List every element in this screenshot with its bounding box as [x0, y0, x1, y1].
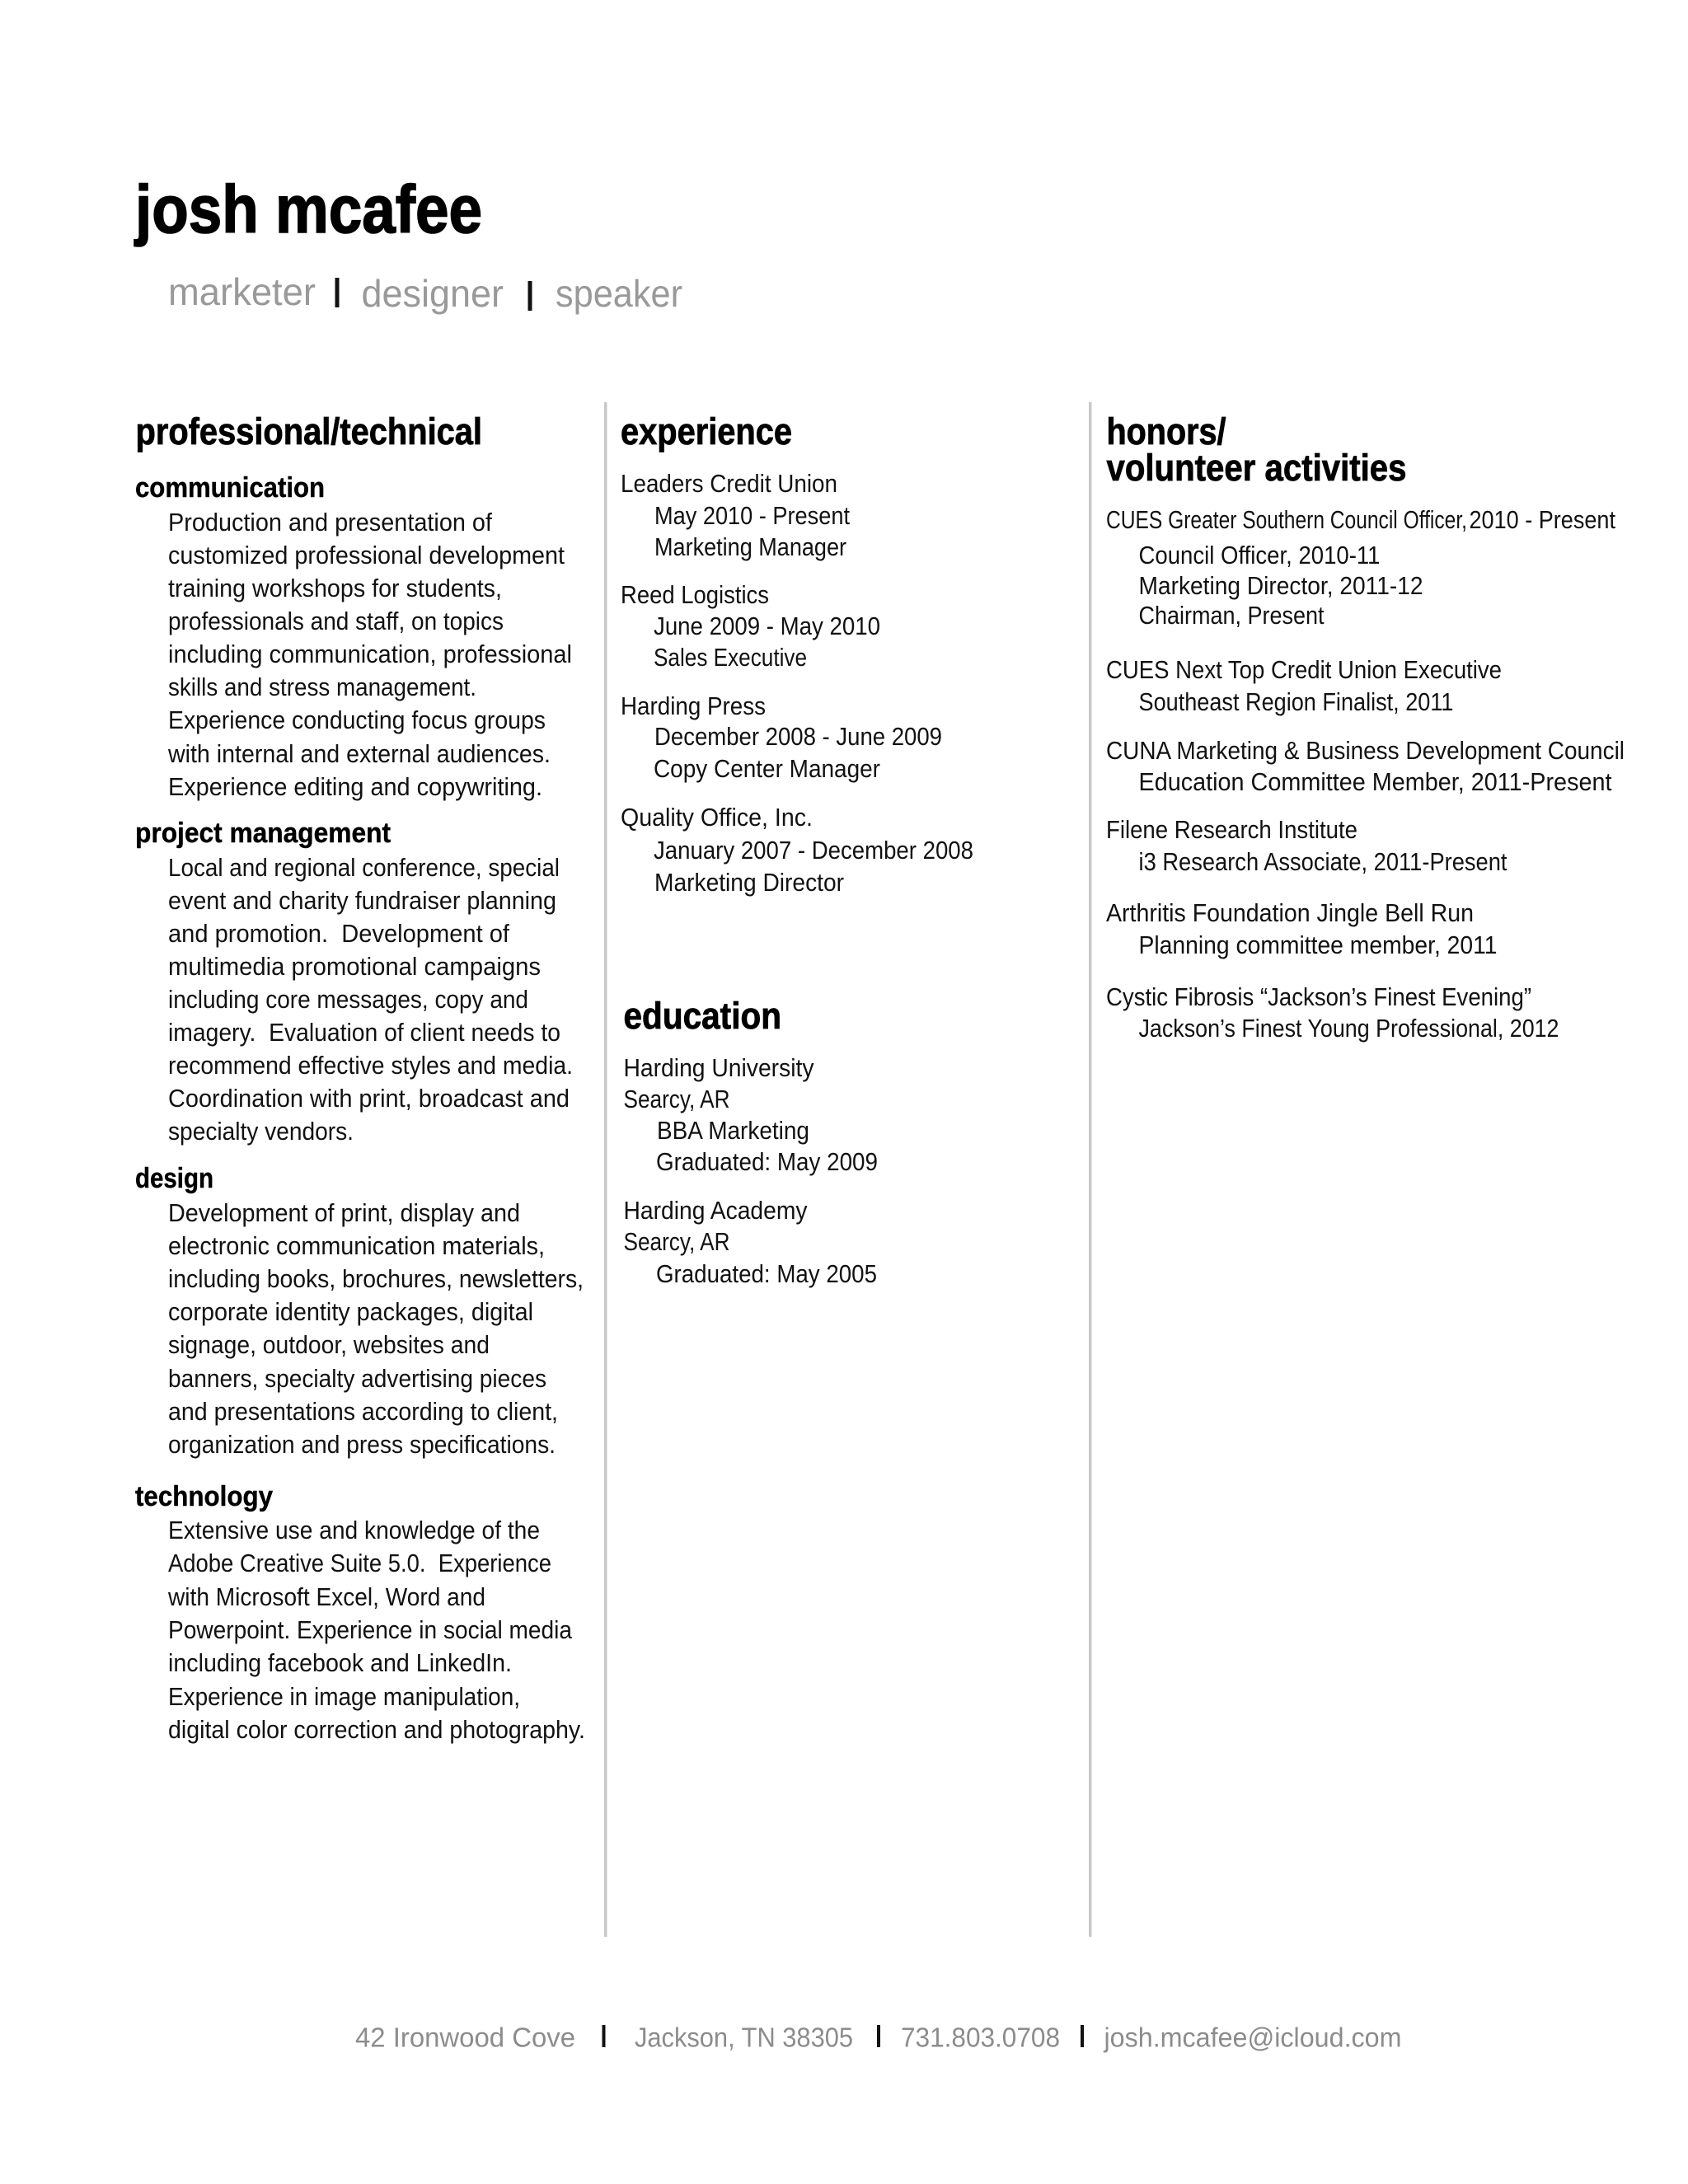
- job: Harding Press: Copy Center Manager: [654, 755, 880, 783]
- title: name: josh mcafee: [134, 172, 482, 247]
- text block: project management: event and charity fundraiser planning: [168, 887, 556, 915]
- text block: communication: skills and stress management.: [168, 673, 476, 701]
- text block: technology: Adobe Creative Suite 5.0. Experience: [168, 1549, 551, 1577]
- subheading: communication: communication: [135, 472, 325, 504]
- entry: CUES Next Top Credit Union Executive: CUES Next Top Credit Union Executive: [1106, 656, 1502, 684]
- heading: education: education: [623, 995, 781, 1037]
- section: communication: [135, 472, 572, 801]
- school: Harding University: Harding University: [623, 1054, 814, 1082]
- footer: contact details: 42 Ironwood Cove: [355, 2022, 575, 2052]
- school: Harding University: Searcy, AR: [623, 1085, 730, 1113]
- text block: project management: Local and regional conference, special: [168, 854, 560, 882]
- text block: project management: imagery. Evaluation of client needs to: [168, 1019, 560, 1047]
- job: Leaders Credit Union: Leaders Credit Union: [621, 470, 837, 498]
- text block: design: corporate identity packages, digital: [168, 1298, 533, 1326]
- text block: design: signage, outdoor, websites and: [168, 1331, 490, 1359]
- entry: Cystic Fibrosis Jackson's Finest Evening: Cystic Fibrosis “Jackson’s Finest Evening”: [1106, 983, 1531, 1011]
- job: Harding Press: December 2008 - June 2009: [654, 723, 942, 751]
- job: Harding Press: [621, 692, 942, 783]
- entry: CUES Next Top Credit Union Executive: Southeast Region Finalist, 2011: [1139, 688, 1454, 716]
- job: Quality Office, Inc.: January 2007 - December 2008: [654, 837, 973, 865]
- entry: Filene Research Institute: [1106, 816, 1507, 876]
- job: Quality Office, Inc.: Marketing Director: [654, 869, 844, 897]
- text block: communication: with internal and external audiences.: [167, 740, 551, 768]
- school: Harding Academy: Searcy, AR: [623, 1228, 730, 1256]
- job: Reed Logistics: [621, 581, 880, 672]
- entry: CUES Greater Southern Council Officer: 2010 - Present: [1469, 506, 1615, 534]
- heading: experience: experience: [621, 410, 792, 452]
- heading: honors/volunteer activities: volunteer activities: [1106, 447, 1406, 489]
- text block: project management: [168, 854, 573, 1146]
- text block: technology: [167, 1516, 585, 1744]
- entry: Arthritis Foundation Jingle Bell Run: Planning committee member, 2011: [1139, 931, 1497, 959]
- text block: technology: Experience in image manipulation,: [168, 1683, 520, 1711]
- school: Harding University: [623, 1054, 878, 1176]
- section: design: [135, 1163, 584, 1459]
- heading: honors/volunteer activities: honors/: [1106, 410, 1226, 452]
- school: Harding University: Graduated: May 2009: [656, 1148, 878, 1176]
- entry: Arthritis Foundation Jingle Bell Run: [1106, 899, 1497, 959]
- text block: communication: customized professional development: [168, 541, 565, 569]
- text block: project management: and promotion. Development of: [168, 920, 509, 948]
- entry: CUES Greater Southern Council Officer: [1106, 506, 1615, 630]
- text block: project management: Coordination with print, broadcast and: [168, 1085, 570, 1113]
- subheading: technology: technology: [135, 1481, 273, 1512]
- section: technology: [135, 1481, 585, 1744]
- text block: project management: including core messages, copy and: [168, 986, 528, 1014]
- job: Quality Office, Inc.: [621, 804, 973, 897]
- text block: communication: Production and presentation of: [168, 509, 492, 537]
- text block: design: Development of print, display and: [168, 1199, 520, 1227]
- entry: CUNA Marketing & Business Development Council: [1106, 737, 1625, 796]
- text block: communication: Experience conducting focus groups: [168, 706, 546, 734]
- text block: design: [168, 1199, 584, 1459]
- text block: technology: including facebook and LinkedIn.: [168, 1649, 512, 1677]
- entry: CUES Next Top Credit Union Executive: [1106, 656, 1502, 716]
- panel: education: [623, 995, 878, 1288]
- heading: professional/technical: professional/technical: [135, 410, 482, 452]
- panel: honors/volunteer activities: [1106, 410, 1625, 1043]
- subheading: design: design: [135, 1163, 213, 1194]
- panel: experience: [621, 410, 973, 897]
- entry: Filene Research Institute: i3 Research Associate, 2011-Present: [1139, 848, 1507, 876]
- school: Harding University: BBA Marketing: [657, 1117, 809, 1145]
- text block: communication: professionals and staff, on topics: [168, 607, 504, 635]
- entry: CUNA Marketing & Business Development Council: CUNA Marketing & Business Development Council: [1106, 737, 1625, 765]
- text block: communication: Experience editing and copywriting.: [168, 773, 542, 801]
- tagline: designer: [361, 272, 504, 315]
- footer: contact details: josh.mcafee@icloud.com: [1104, 2022, 1401, 2052]
- panel: professional/technical: [135, 410, 585, 1744]
- job: Harding Press: Harding Press: [621, 692, 766, 720]
- text block: design: and presentations according to client,: [168, 1398, 558, 1426]
- tagline: marketer: [168, 270, 316, 313]
- tagline: speaker: [556, 272, 682, 315]
- entry: Arthritis Foundation Jingle Bell Run: Arthritis Foundation Jingle Bell Run: [1106, 899, 1474, 927]
- school: Harding Academy: [623, 1197, 877, 1288]
- footer: contact details: Jackson, TN 38305: [635, 2022, 853, 2052]
- heading: honors/volunteer activities: [1106, 410, 1406, 489]
- text block: project management: multimedia promotional campaigns: [168, 953, 541, 981]
- text block: technology: digital color correction and photography.: [168, 1716, 585, 1744]
- text block: design: electronic communication materials,: [168, 1232, 545, 1260]
- entry: Filene Research Institute: Filene Research Institute: [1106, 816, 1357, 844]
- entry: CUES Greater Southern Council Officer: Marketing Director, 2011-12: [1139, 572, 1423, 600]
- job: Reed Logistics: Sales Executive: [654, 644, 807, 672]
- text block: project management: specialty vendors.: [168, 1118, 354, 1146]
- text block: design: including books, brochures, newsletters,: [168, 1265, 584, 1293]
- job: Reed Logistics: June 2009 - May 2010: [654, 612, 880, 640]
- text block: technology: with Microsoft Excel, Word and: [167, 1583, 485, 1611]
- text block: project management: recommend effective styles and media.: [168, 1052, 573, 1080]
- entry: CUES Greater Southern Council Officer: Council Officer, 2010-11: [1139, 541, 1380, 569]
- text block: communication: including communication, professional: [168, 640, 572, 668]
- text block: communication: [167, 509, 572, 801]
- text block: technology: Extensive use and knowledge of the: [168, 1516, 540, 1544]
- footer: contact details: 731.803.0708: [901, 2022, 1060, 2052]
- text block: design: organization and press specifications.: [168, 1431, 556, 1459]
- entry: CUNA Marketing & Business Development Council: Education Committee Member, 2011-Present: [1139, 768, 1612, 796]
- entry: Cystic Fibrosis Jackson's Finest Evening: Jackson’s Finest Young Professional, 2012: [1139, 1015, 1559, 1043]
- subheading: project management: project management: [135, 818, 391, 849]
- entry: CUES Greater Southern Council Officer: Chairman, Present: [1139, 602, 1325, 630]
- job: Reed Logistics: Reed Logistics: [621, 581, 769, 609]
- footer: contact details: [355, 2022, 1401, 2052]
- text block: design: banners, specialty advertising pieces: [168, 1365, 546, 1393]
- job: Leaders Credit Union: May 2010 - Present: [654, 502, 850, 530]
- school: Harding Academy: Graduated: May 2005: [656, 1260, 877, 1288]
- entry: Cystic Fibrosis Jackson's Finest Evening: [1106, 983, 1559, 1043]
- text block: technology: Powerpoint. Experience in social media: [168, 1616, 572, 1644]
- entry: CUES Greater Southern Council Officer: CUES Greater Southern Council Officer,: [1106, 506, 1467, 534]
- tagline: [168, 270, 682, 315]
- job: Quality Office, Inc.: Quality Office, Inc.: [621, 804, 813, 832]
- section: project management: [135, 818, 573, 1146]
- job: Leaders Credit Union: Marketing Manager: [654, 533, 846, 561]
- job: Leaders Credit Union: [621, 470, 850, 561]
- text block: communication: training workshops for students,: [168, 574, 502, 602]
- school: Harding Academy: Harding Academy: [623, 1197, 808, 1225]
